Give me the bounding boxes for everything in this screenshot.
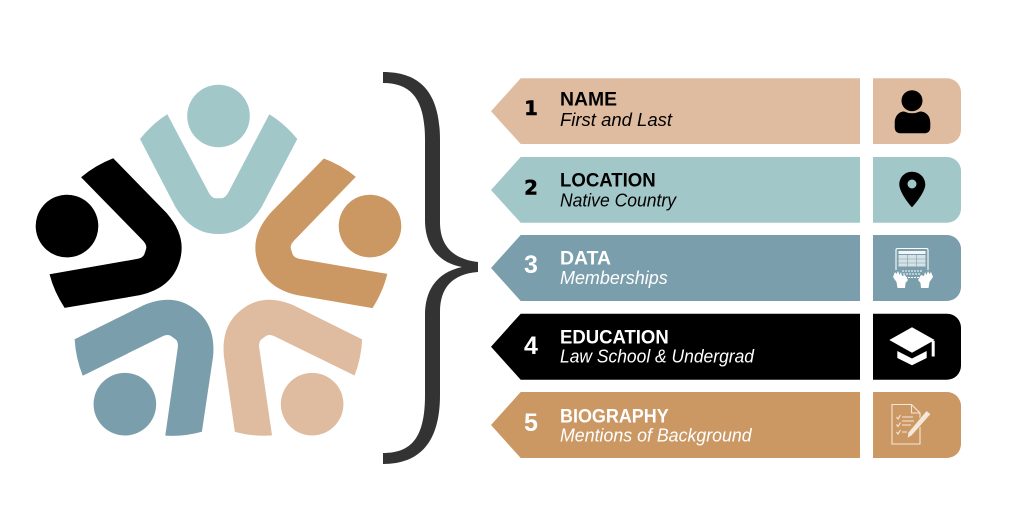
heading: biography: BIOGRAPHY: [560, 406, 669, 428]
row 5: biography: [491, 392, 961, 458]
row 1: name: [491, 78, 961, 144]
icon: map pin: [899, 172, 925, 207]
figure: orange: [234, 142, 424, 337]
arrow bar: [491, 392, 860, 458]
figure: black: [13, 141, 204, 337]
icon: laptop and hands: [893, 248, 933, 288]
subtitle: First and Last: [560, 110, 673, 130]
heading: education: EDUCATION: [560, 326, 669, 348]
icon: person: [895, 90, 930, 133]
heading: location: LOCATION: [560, 170, 656, 192]
number 1: 1: [524, 97, 538, 120]
row 2: location: [491, 157, 961, 223]
icon: document and pencil: [892, 404, 931, 444]
figure: tan: [179, 263, 394, 476]
subtitle: Mentions of Background: [560, 426, 753, 446]
number 5: 5: [524, 409, 538, 437]
number 4: 4: [524, 332, 538, 360]
figure: slate blue: [43, 262, 258, 476]
icon tile: [873, 392, 961, 458]
number 2: 2: [524, 176, 538, 199]
icon tile: [873, 235, 961, 301]
icon: graduation cap: [889, 327, 935, 365]
subtitle: Law School & Undergrad: [560, 347, 755, 367]
arrow bar: [491, 157, 860, 223]
icon tile: [873, 314, 961, 380]
figure: teal: [140, 85, 297, 234]
number 3: 3: [524, 251, 538, 279]
heading: data: DATA: [560, 247, 611, 269]
icon tile: [873, 78, 961, 144]
row 4: education: [491, 314, 961, 380]
curly brace: [383, 72, 478, 464]
heading: name: NAME: [560, 89, 617, 111]
subtitle: Memberships: [560, 268, 668, 288]
row 3: data: [491, 235, 961, 301]
subtitle: Native Country: [560, 191, 677, 211]
arrow bar: [491, 78, 860, 144]
arrow bar: [491, 235, 860, 301]
arrow bar: [491, 314, 860, 380]
icon tile: [873, 157, 961, 223]
logo: five figures in a circle: [13, 85, 424, 476]
